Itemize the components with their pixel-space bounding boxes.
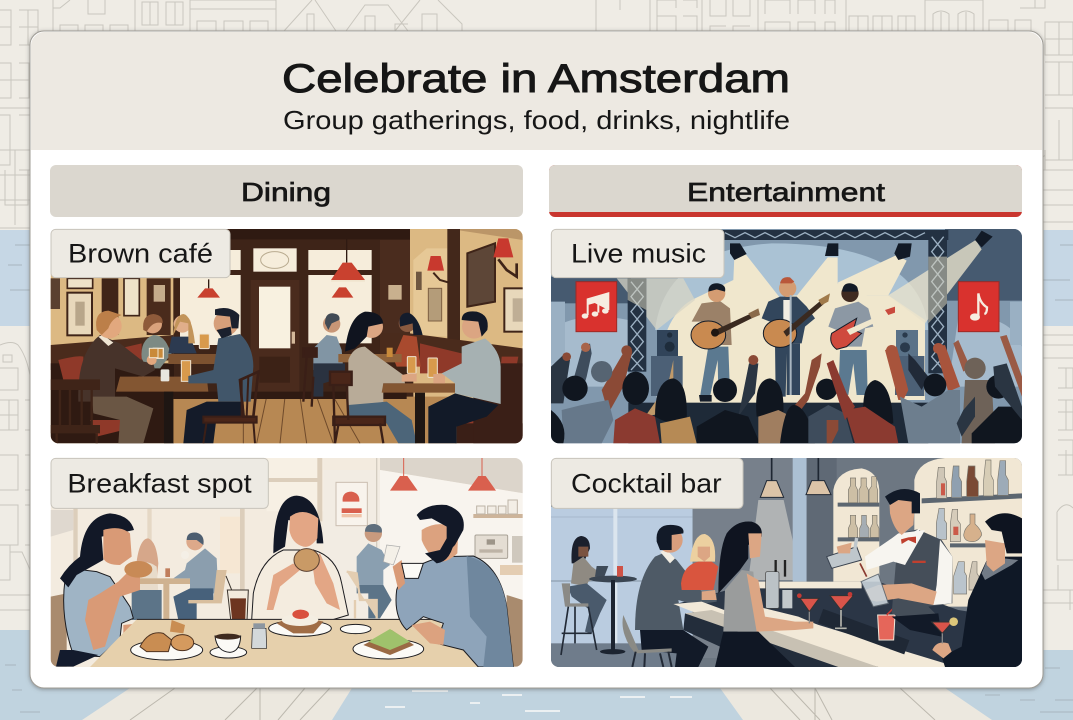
- lamps: [772, 458, 818, 481]
- iced drink: [226, 590, 249, 619]
- bartender: [892, 529, 952, 623]
- girl dark: [393, 335, 421, 367]
- section heading: Dining: Dining: [241, 177, 331, 207]
- bearded man: [188, 334, 253, 402]
- spotlights: [657, 295, 925, 400]
- bg people left: [136, 538, 158, 576]
- seated man: [635, 552, 717, 630]
- woman left: [51, 593, 67, 667]
- panel: Brown café: [50, 229, 525, 443]
- lamps: [730, 243, 747, 260]
- woman centre: [252, 550, 348, 620]
- bg man right: [357, 543, 390, 587]
- man in suit: [942, 557, 1022, 667]
- man right: [396, 556, 513, 667]
- subtitle: Group gatherings, food, drinks, nightlife: [283, 105, 790, 135]
- stage: [686, 395, 901, 403]
- woman long hair: [348, 347, 405, 405]
- bg people: [141, 335, 172, 368]
- title: Celebrate in Amsterdam: [282, 57, 790, 101]
- label: Breakfast spot: [51, 458, 268, 508]
- signs: [576, 282, 617, 332]
- man right: [442, 338, 501, 404]
- shelf and coffee machine: [473, 514, 523, 518]
- right table: [382, 383, 455, 393]
- bar counter: [673, 602, 878, 667]
- man left: [78, 335, 155, 402]
- panel: Breakfast spot: [51, 458, 523, 667]
- woman at bar: [718, 521, 762, 593]
- lamps: [209, 233, 347, 288]
- label: Brown café: Brown café: [68, 239, 213, 269]
- label: Breakfast spot: Breakfast spot: [67, 469, 252, 499]
- bar back: [678, 582, 1022, 667]
- performer 2: [775, 343, 800, 397]
- left table: [116, 377, 208, 392]
- poster: [336, 482, 367, 526]
- martinis: [800, 598, 819, 612]
- panel: Live music: [551, 229, 1022, 443]
- label: Live music: [551, 229, 724, 278]
- lamps: [404, 458, 482, 476]
- section heading: Dining: [50, 165, 523, 217]
- crowd back: [551, 353, 570, 403]
- performer 3: [838, 350, 868, 395]
- label: Live music: Live music: [571, 239, 706, 269]
- label: Cocktail bar: [551, 458, 743, 508]
- bg woman stool: [571, 536, 590, 563]
- crowd front: [562, 376, 588, 401]
- speakers: [657, 330, 678, 356]
- label: Cocktail bar: Cocktail bar: [571, 469, 722, 499]
- section heading: Entertainment: Entertainment: [687, 177, 886, 207]
- right bg man: [313, 335, 343, 370]
- plates: [131, 640, 203, 660]
- label: Brown café: [51, 229, 230, 278]
- header band: [31, 32, 1042, 150]
- shelves: [833, 468, 879, 583]
- table: [90, 619, 483, 667]
- beer tap: [766, 572, 779, 608]
- panel: Cocktail bar: [551, 458, 1022, 667]
- blond woman: [690, 534, 715, 562]
- performer 1: [700, 347, 730, 397]
- section heading: Entertainment: [549, 165, 1022, 217]
- truss: [722, 230, 948, 240]
